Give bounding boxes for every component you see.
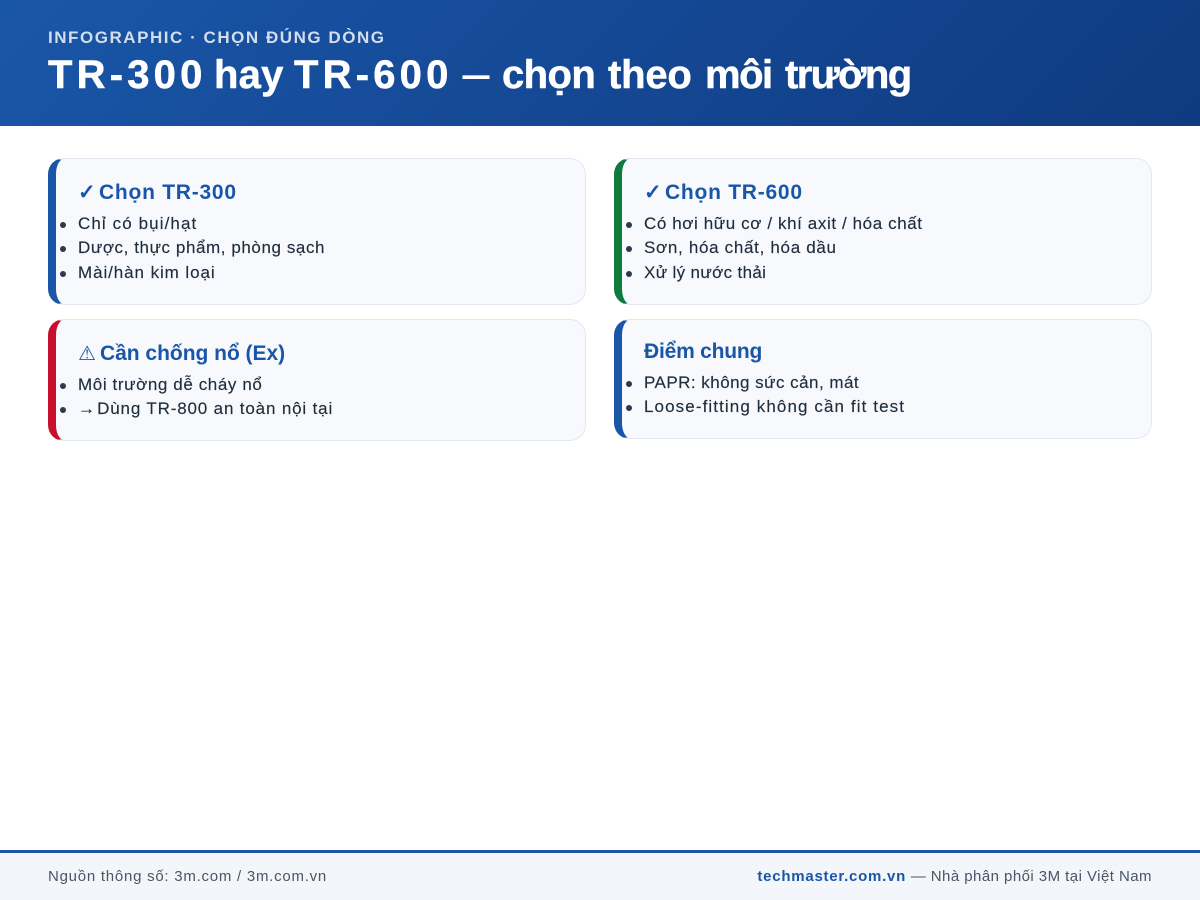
panel: choose TR-300	[48, 158, 586, 305]
eyebrow label: INFOGRAPHIC · CHỌN ĐÚNG DÒNG	[48, 28, 386, 47]
title: TR-300	[48, 53, 207, 97]
panel: choose TR-600	[614, 158, 1152, 305]
distributor note: techmaster.com.vn — Nhà phân phối 3M tại Việt Nam	[757, 868, 1152, 884]
list: common points: PAPR: không sức cản, mát	[644, 373, 859, 392]
panel: explosion proof	[48, 319, 586, 441]
list: TR-600 uses: Có hơi hữu cơ / khí axit / hóa chất	[644, 214, 923, 233]
title: —	[463, 60, 489, 90]
title: chọn	[502, 53, 595, 97]
list: TR-300 uses	[60, 214, 325, 282]
title: hay	[214, 53, 284, 97]
list: explosion proof notes: → Dùng TR-800 an toàn nội tại	[78, 399, 333, 418]
heading: choose TR-600: Chọn TR-600	[665, 181, 803, 204]
header banner	[0, 0, 1200, 126]
heading: choose TR-300: ✓	[78, 181, 96, 204]
list: common points	[626, 373, 905, 416]
list: TR-300 uses: Mài/hàn kim loại	[78, 263, 216, 282]
heading: explosion proof: Cần chống nổ (Ex)	[100, 342, 285, 365]
list: common points: Loose-fitting không cần fit test	[644, 397, 905, 416]
title: trường	[785, 53, 911, 97]
title: theo	[608, 53, 692, 97]
list: explosion proof notes	[60, 375, 333, 418]
heading: common points: Điểm chung	[644, 340, 762, 363]
list: explosion proof notes: Môi trường dễ cháy nổ	[78, 375, 262, 394]
footer bar	[0, 850, 1200, 900]
list: TR-600 uses	[626, 214, 923, 282]
heading: choose TR-600: ✓	[644, 181, 662, 204]
list: TR-600 uses: Xử lý nước thải	[644, 263, 766, 282]
heading: choose TR-300: Chọn TR-300	[99, 181, 237, 204]
list: TR-600 uses: Sơn, hóa chất, hóa dầu	[644, 238, 837, 257]
panel: common points	[614, 319, 1152, 439]
list: TR-300 uses: Dược, thực phẩm, phòng sạch	[78, 238, 325, 257]
title: môi	[705, 53, 772, 97]
list: TR-300 uses: Chỉ có bụi/hạt	[78, 214, 197, 233]
title	[48, 53, 911, 97]
title: TR-600	[294, 53, 453, 97]
heading: explosion proof: ⚠	[78, 343, 96, 365]
source note: Nguồn thông số: 3m.com / 3m.com.vn	[48, 868, 327, 884]
